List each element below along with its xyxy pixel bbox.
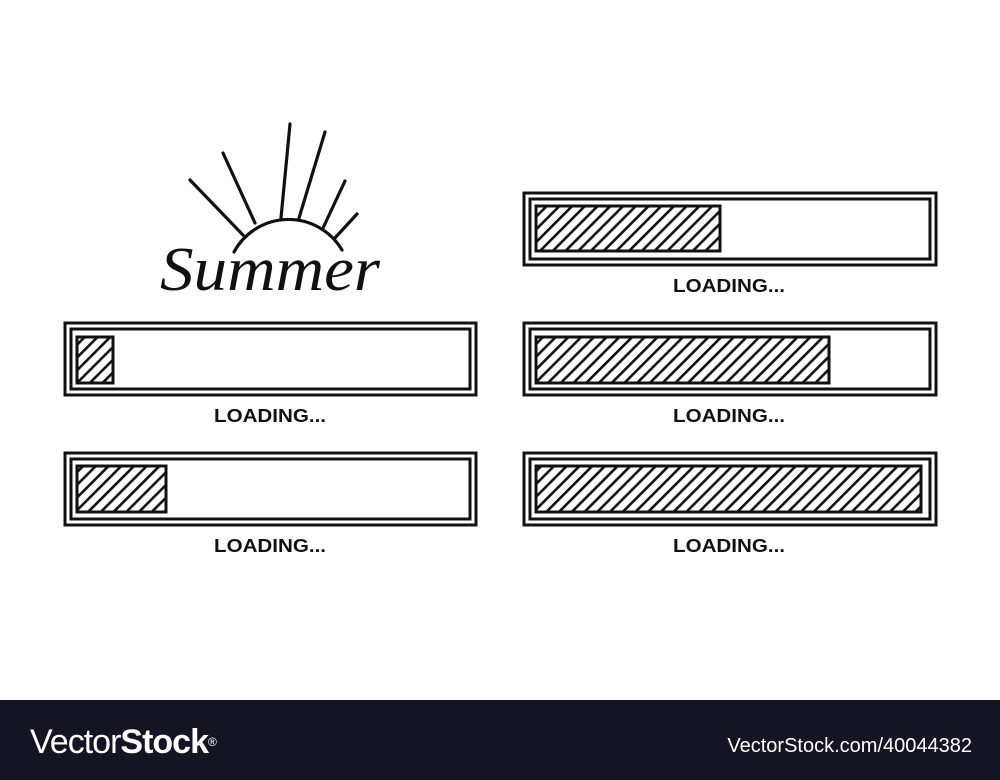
progress bar 5 (100%): LOADING... <box>673 536 785 556</box>
progress bar 4 (75%) <box>524 323 936 426</box>
footer bar <box>0 700 1000 780</box>
footer logo: VectorStock® <box>30 723 216 761</box>
progress bar 4 (75%): LOADING... <box>673 406 785 426</box>
progress bar 1 (10%): LOADING... <box>214 406 326 426</box>
title: Summer: Summer <box>160 236 381 304</box>
footer url: VectorStock.com/40044382 <box>727 735 972 757</box>
icon: sun with rays <box>190 124 357 252</box>
progress bar 5 (100%) <box>524 453 936 556</box>
progress bar 2 (25%) <box>65 453 476 556</box>
progress bar 3 (45%): LOADING... <box>673 276 785 296</box>
progress bar 2 (25%): LOADING... <box>214 536 326 556</box>
progress bar 3 (45%) <box>524 193 936 296</box>
progress bar 1 (10%) <box>65 323 476 426</box>
